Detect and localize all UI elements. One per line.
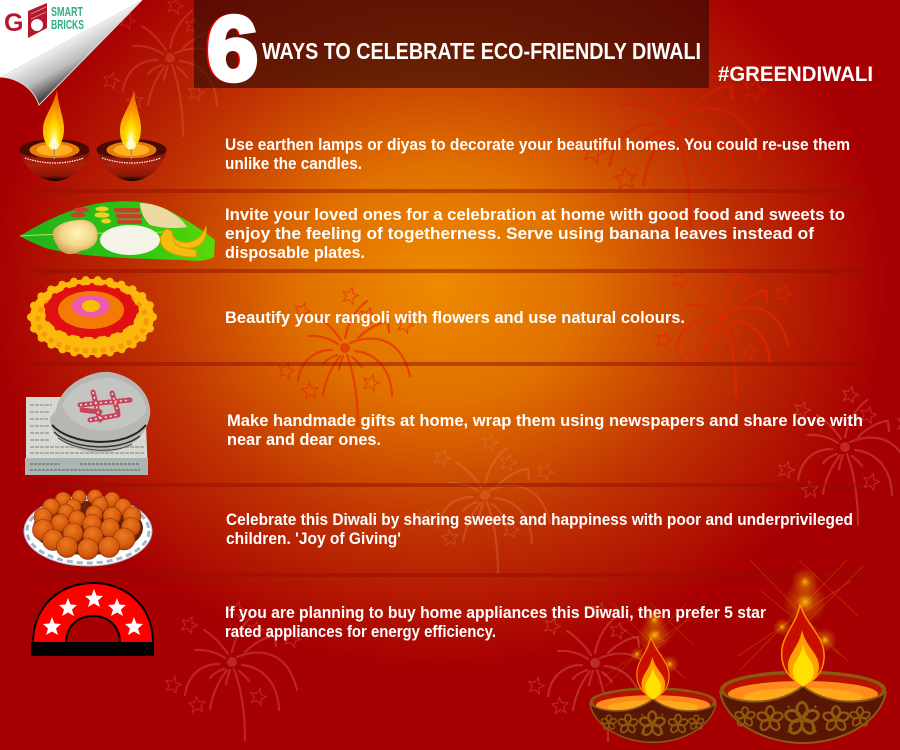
illustration: large diya (720, 560, 886, 743)
hashtag: #GREENDIWALI (718, 63, 873, 86)
icon: rangoli (30, 279, 154, 355)
numeral 6: 6 (207, 0, 258, 100)
text: row 1 (225, 135, 850, 173)
icon: banana leaf meal (20, 201, 215, 261)
page curl with logo (0, 0, 142, 105)
numeral 6: 6 (205, 0, 256, 100)
icon: five star rating arch (31, 583, 154, 656)
text: row 2: disposable plates. (225, 243, 365, 262)
text: row 5: Celebrate this Diwali by sharing sweets and happiness with poor and underprivileged (226, 510, 853, 529)
text: row 4: near and dear ones. (227, 430, 381, 449)
text: row 2 (225, 205, 845, 262)
text: row 4 (227, 411, 863, 449)
text: row 2: enjoy the feeling of togetherness. Serve using banana leaves instead of (225, 224, 814, 243)
text: row 5: children. 'Joy of Giving' (226, 529, 401, 548)
text: row 1: unlike the candles. (225, 154, 362, 173)
row dividers (28, 189, 863, 577)
text: row 6: If you are planning to buy home appliances this Diwali, then prefer 5 star (225, 603, 766, 622)
text: row 6 (225, 603, 766, 641)
title: WAYS TO CELEBRATE ECO-FRIENDLY DIWALI (262, 38, 701, 64)
logo: BRICKS (51, 18, 84, 32)
title band (194, 0, 709, 88)
text: row 5 (226, 510, 853, 548)
text: row 2: Invite your loved ones for a celebration at home with good food and sweets to (225, 205, 845, 224)
text: row 3: Beautify your rangoli with flowers and use natural colours. (225, 308, 685, 327)
text: row 1: Use earthen lamps or diyas to decorate your beautiful homes. You could re-use them (225, 135, 850, 154)
logo: SMART (51, 5, 83, 19)
icon: diyas (20, 90, 166, 181)
icon: plate of sweets (24, 490, 152, 566)
text: row 4: Make handmade gifts at home, wrap them using newspapers and share love with (227, 411, 863, 430)
logo: G (4, 9, 23, 37)
illustration: small diya (590, 603, 716, 742)
icon: newspaper gift (25, 372, 150, 475)
logo (4, 3, 84, 38)
text: row 6: rated appliances for energy efficiency. (225, 622, 496, 641)
